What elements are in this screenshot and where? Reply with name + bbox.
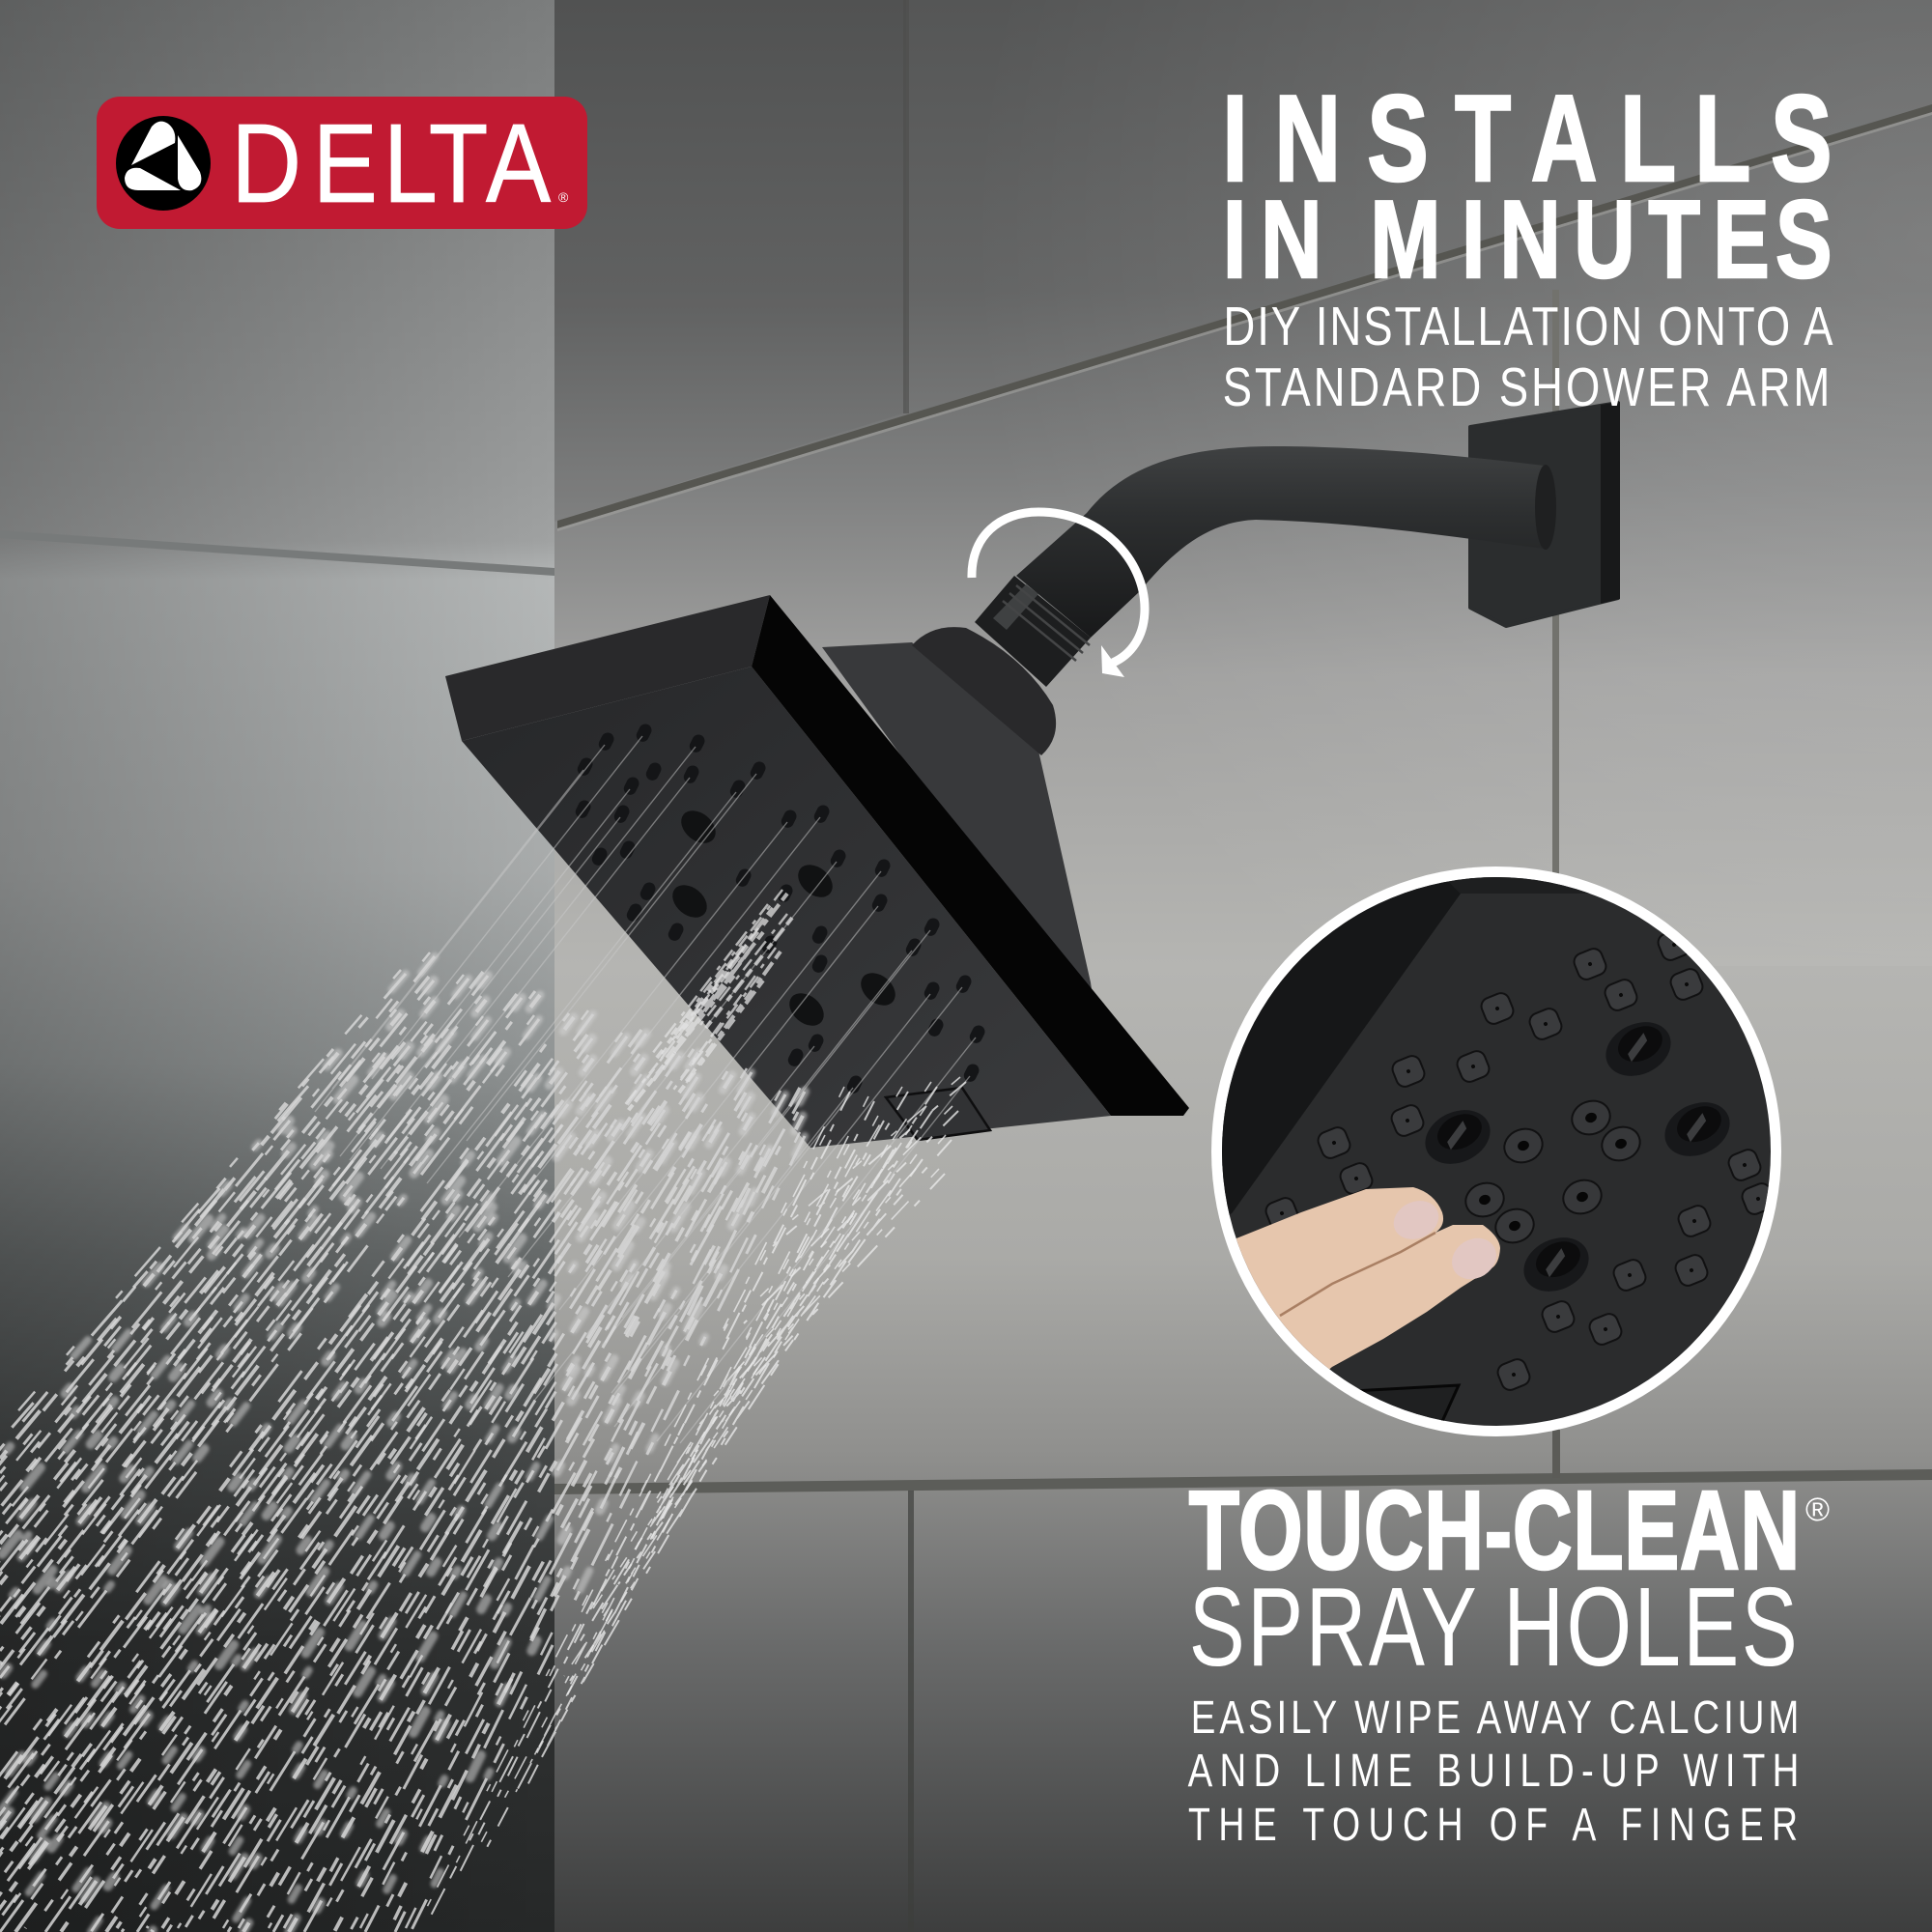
fine nozzle jets	[315, 736, 976, 1443]
text: wipe away description	[1188, 1692, 1799, 1851]
water spray	[0, 736, 976, 1932]
description line 1: EASILY WIPE AWAY CALCIUM	[1191, 1692, 1799, 1744]
white ring	[1211, 867, 1781, 1436]
spray nozzles	[579, 730, 979, 1094]
arm end ring	[1535, 465, 1556, 550]
logo mark	[116, 116, 211, 211]
background: left tile column	[0, 0, 554, 1932]
spray face	[462, 667, 1111, 1148]
rotation arrow icon	[972, 512, 1145, 677]
wall flange	[1470, 402, 1620, 626]
close-up of spray face	[1217, 869, 1777, 1430]
headline line 2: INMINUTES	[1223, 178, 1833, 301]
fingers	[1236, 1187, 1500, 1370]
large nozzles	[1426, 1022, 1729, 1292]
cone body	[822, 642, 1096, 1024]
round nozzles	[1461, 1095, 1645, 1248]
shower head	[445, 595, 1189, 1148]
shower arm with wall flange	[975, 402, 1620, 687]
soft water clusters	[0, 956, 805, 1932]
subhead line 1: DIY INSTALLATION ONTO A	[1223, 295, 1833, 356]
Delta logo badge	[97, 97, 587, 229]
spray holes line: SPRAY HOLES	[1189, 1564, 1798, 1690]
dashed water streaks	[0, 952, 805, 1932]
collar	[912, 627, 1056, 755]
description line 3: THE TOUCH OF A FINGER	[1188, 1800, 1798, 1851]
bright splash at head	[623, 890, 792, 1111]
background: right wall tiles	[554, 0, 1932, 1932]
black side band	[752, 595, 1189, 1116]
threaded neck	[975, 576, 1091, 687]
registered mark: ®	[1805, 1492, 1830, 1528]
small nozzles	[1264, 926, 1776, 1393]
curved arm pipe	[1016, 446, 1544, 638]
text: DIY installation	[1223, 295, 1833, 417]
inset circle: touch-clean close-up	[1211, 867, 1781, 1436]
large spray holes	[667, 804, 901, 1033]
description line 2: AND LIME BUILD-UP WITH	[1188, 1746, 1799, 1797]
headline line 1: INSTALLS	[1222, 70, 1833, 207]
heading: touch-clean spray holes	[1189, 1467, 1830, 1690]
touch-clean line: TOUCH-CLEAN	[1189, 1467, 1800, 1593]
top bevel	[445, 595, 770, 741]
red badge	[97, 97, 587, 229]
thin streaks over wall	[424, 1077, 966, 1918]
spray selector tab	[886, 1088, 990, 1140]
registered mark: ®	[558, 189, 569, 205]
wordmark: DELTA	[231, 102, 552, 227]
heading: installs in minutes	[1222, 70, 1833, 301]
subhead line 2: STANDARD SHOWER ARM	[1223, 355, 1830, 417]
